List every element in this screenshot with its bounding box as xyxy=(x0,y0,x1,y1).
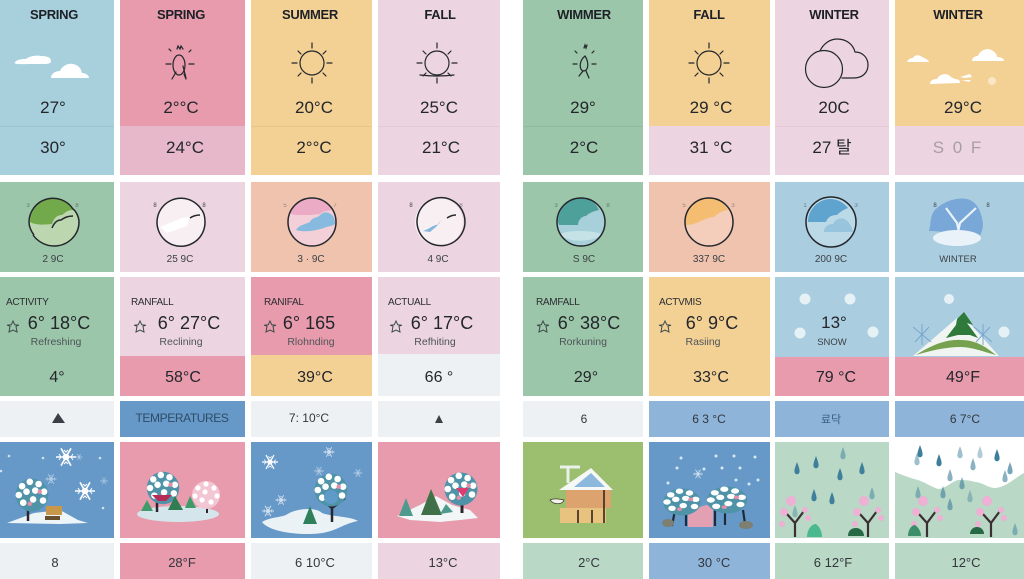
cell: value xyxy=(895,543,1024,579)
snow hills xyxy=(397,496,478,522)
icon: star xyxy=(7,321,19,332)
panel: white sky and green hill rain xyxy=(895,442,1024,538)
tick values: 3 xyxy=(554,203,558,209)
panel: row 4 strip values xyxy=(0,401,1024,437)
raindrops xyxy=(792,447,875,517)
icon: amber globe xyxy=(685,198,733,246)
panel: peach phase card, amber globe xyxy=(649,182,770,272)
panel: column 8 winter, yellow and pink xyxy=(895,0,1024,175)
cell: value: 6 xyxy=(581,412,588,426)
icon: sun over horizon xyxy=(417,43,457,83)
icon: clouds and wind xyxy=(907,49,1004,85)
tick values: 8 xyxy=(606,203,610,209)
heading: SPRING xyxy=(30,7,78,22)
cell: value: 7: 10°C xyxy=(289,411,329,425)
snow dots xyxy=(666,454,760,486)
tick values: 8 xyxy=(409,203,413,209)
temperature: 2°°C xyxy=(163,98,199,117)
value: 25 9C xyxy=(167,254,193,265)
panel: snow tree xyxy=(895,277,1024,396)
panel: green rain xyxy=(775,442,889,538)
tick values xyxy=(682,203,735,209)
blossom saplings xyxy=(779,496,884,537)
snowflakes xyxy=(0,448,108,509)
icon: blue blob with white figure xyxy=(929,199,983,246)
cell: value: 13°C xyxy=(428,555,458,570)
label: RANIFAL xyxy=(264,297,304,308)
panel: rainfall rose xyxy=(251,277,372,396)
temperature: 29° xyxy=(570,98,596,117)
cell: value xyxy=(251,543,372,579)
panel: green phase card, teal globe xyxy=(523,182,643,272)
cell: value xyxy=(120,543,245,579)
raindrops xyxy=(914,445,1018,535)
small green tree xyxy=(303,506,317,524)
tick values: 8 xyxy=(933,203,937,209)
temperature range: 6° 9°C xyxy=(686,313,738,333)
icon: clouds outline xyxy=(806,39,868,88)
cell: value: 2°C xyxy=(578,555,600,570)
cell: value xyxy=(895,401,1024,437)
tick values: 1 xyxy=(803,203,807,209)
blossom trees xyxy=(663,486,747,526)
panel: green phase card xyxy=(0,182,114,272)
tick values: 5 xyxy=(283,203,287,209)
icon: blue globe xyxy=(806,197,856,247)
icon: star xyxy=(264,321,276,332)
caption: Refreshing xyxy=(31,336,82,348)
temperature range: 6° 165 xyxy=(283,313,335,333)
caption: Rorkuning xyxy=(559,336,607,348)
heading: SPRING xyxy=(157,7,205,22)
tick values xyxy=(933,203,990,209)
temperature range: 6° 18°C xyxy=(28,313,90,333)
snow island xyxy=(137,506,219,522)
caption: Reclining xyxy=(159,336,203,348)
temperature: 20C xyxy=(818,98,850,117)
temperature: 31 °C xyxy=(690,138,732,157)
lower value: 39°C xyxy=(297,369,333,386)
temperature: 21°C xyxy=(422,138,460,157)
icon: sprout figure xyxy=(166,46,194,79)
snowflakes xyxy=(262,447,362,516)
tick values: 5 xyxy=(682,203,686,209)
temperature: 29 °C xyxy=(690,98,732,117)
icon: pink globe with blue cloud xyxy=(288,198,336,246)
heading: WINTER xyxy=(933,7,984,22)
snowflake xyxy=(693,470,703,478)
icon: clouds xyxy=(15,56,89,78)
icon: star xyxy=(537,321,549,332)
tick values: 8 xyxy=(202,203,206,209)
panel: row 2 moon phase icons xyxy=(0,182,1024,272)
lower value: 66 ° xyxy=(425,369,453,386)
tick values xyxy=(409,203,463,209)
cell: value xyxy=(523,401,643,437)
panel: light blue phase card, snowflake blob xyxy=(895,182,1024,272)
icon: star xyxy=(659,321,671,332)
blossom trees xyxy=(147,472,220,513)
lower value: 49°F xyxy=(946,369,980,386)
panel: pink with trees xyxy=(378,442,500,538)
temperature: 25°C xyxy=(420,98,458,117)
caption: Rasiing xyxy=(685,336,721,348)
caption: SNOW xyxy=(817,337,847,348)
temperature: 29°C xyxy=(944,98,982,117)
evergreen trees xyxy=(399,489,453,516)
tick values xyxy=(153,203,206,209)
tick values: 8 xyxy=(986,203,990,209)
value: 4 9C xyxy=(427,254,449,265)
heading: WIMMER xyxy=(557,7,612,22)
shrubs xyxy=(807,524,864,537)
cell: tent icon xyxy=(0,401,114,437)
panel: column 4 fall, light pink xyxy=(378,0,500,175)
label: ACTUALL xyxy=(388,297,432,308)
panel: column 7 winter, light pink xyxy=(775,0,889,175)
temperature: S 0 F xyxy=(933,138,983,157)
icon: evergreen tree xyxy=(913,312,999,356)
ground snow xyxy=(7,510,88,524)
cell: value: 6 7°C xyxy=(950,412,980,426)
cell: value: 30 °C xyxy=(698,555,730,570)
panel: column 5 winter, green xyxy=(523,0,643,175)
label: RANFALL xyxy=(131,297,174,308)
icon: star xyxy=(134,321,146,332)
label: ACTVMIS xyxy=(659,297,702,308)
tick values xyxy=(554,203,610,209)
heading: FALL xyxy=(424,7,456,22)
tick values: 8 xyxy=(153,203,157,209)
panel: column 2 spring, pink xyxy=(120,0,245,175)
tick values: 8 xyxy=(75,203,79,209)
panel: snowy hill and wreath tree xyxy=(251,442,372,538)
caption: WINTER xyxy=(939,254,977,265)
lower value: 33°C xyxy=(693,369,729,386)
label: ACTIVITY xyxy=(6,297,49,308)
snow hills xyxy=(262,509,358,534)
blossom tree xyxy=(16,478,48,521)
lower value: 58°C xyxy=(165,369,201,386)
panel: row 1 season headers and temperatures xyxy=(0,0,1024,175)
tick values: 3 xyxy=(854,203,858,209)
panel: snow xyxy=(775,277,889,396)
temperature: 2°C xyxy=(570,138,598,157)
icon: star xyxy=(390,321,402,332)
shrubs xyxy=(908,525,984,536)
panel: row 3 activity cards xyxy=(0,277,1024,396)
bench xyxy=(45,506,62,520)
temperature range: 6° 38°C xyxy=(558,313,620,333)
label: RAMFALL xyxy=(536,297,580,308)
cell: value: 료닥 xyxy=(821,413,841,426)
cell: value: 6 3 °C xyxy=(692,412,726,426)
cell: small icon xyxy=(378,401,500,437)
value: 337 9C xyxy=(693,254,725,265)
panel: light pink phase card xyxy=(378,182,500,272)
cell: value xyxy=(378,543,500,579)
temperature: 13° xyxy=(821,313,847,332)
heading: FALL xyxy=(693,7,725,22)
panel: activity yellow xyxy=(649,277,770,396)
panel: light pink phase card xyxy=(120,182,245,272)
panel: blossom trees on island xyxy=(120,442,245,538)
heading: SUMMER xyxy=(282,7,339,22)
value: 3 · 9C xyxy=(297,254,325,265)
heading: WINTER xyxy=(809,7,860,22)
cell: value: 8 xyxy=(51,555,59,570)
temperature: 24°C xyxy=(166,138,204,157)
lower value: 4° xyxy=(49,369,65,386)
panel: column 6 fall, yellow and pink xyxy=(649,0,770,175)
cell: value xyxy=(649,401,770,437)
cell: value xyxy=(0,543,114,579)
temperature: 2°°C xyxy=(296,138,332,157)
small green trees xyxy=(141,496,196,511)
panel: column 1 spring, blue xyxy=(0,0,114,175)
temperature range: 6° 17°C xyxy=(411,313,473,333)
icon: faint snowflakes xyxy=(913,324,992,345)
cell: value: 6 12°F xyxy=(814,555,852,570)
panel: actual pink xyxy=(378,277,500,396)
panel: rainfall green xyxy=(523,277,643,396)
icon: sprout figure xyxy=(573,45,596,78)
panel: green with house xyxy=(523,442,643,538)
value: 200 9C xyxy=(815,254,847,265)
cell: temperatures xyxy=(120,401,245,437)
icon: white globe xyxy=(157,198,205,246)
blossom tree xyxy=(444,472,478,513)
cell: value: 6 10°C xyxy=(295,555,335,570)
lower value: 79 °C xyxy=(816,369,856,386)
temperature range: 6° 27°C xyxy=(158,313,220,333)
panel: peach phase card xyxy=(251,182,372,272)
caption: Refhiting xyxy=(414,336,456,348)
temperature: 27 탈 xyxy=(812,138,852,157)
icon: snowballs xyxy=(944,294,1010,338)
panel: column 3 summer, yellow xyxy=(251,0,372,175)
panel: snowy tree and bench xyxy=(0,442,114,538)
cell: value: 12°C xyxy=(951,555,981,570)
temperature: 30° xyxy=(40,138,66,157)
icon: green globe xyxy=(29,198,79,246)
blossom saplings xyxy=(911,496,1007,537)
pink house xyxy=(688,505,713,527)
temperature: 27° xyxy=(40,98,66,117)
cell: value xyxy=(649,543,770,579)
tick values xyxy=(26,203,79,209)
temperature: 20°C xyxy=(295,98,333,117)
panel: rainfall pink xyxy=(120,277,245,396)
cell: value xyxy=(775,401,889,437)
icon: teal globe xyxy=(557,198,605,246)
value: S 9C xyxy=(573,254,595,265)
panel: row 5 illustrations xyxy=(0,442,1024,538)
icon: snowballs xyxy=(794,294,878,338)
panel: light blue phase card, blue globe xyxy=(775,182,889,272)
panel: activity green xyxy=(0,277,114,396)
tick values: 3 xyxy=(26,203,30,209)
rocks xyxy=(662,519,753,529)
panel: row 6 footer values xyxy=(0,543,1024,579)
tick values xyxy=(803,203,858,209)
snowy sky xyxy=(895,442,1024,489)
lower value: 29° xyxy=(574,369,598,386)
caption: Rlohnding xyxy=(287,336,335,348)
cell: value xyxy=(251,401,372,437)
icon: sun xyxy=(292,43,332,83)
wreath tree xyxy=(314,474,348,522)
tick values: 7 xyxy=(333,203,337,209)
tick values xyxy=(283,203,337,209)
cell: value: 28°F xyxy=(168,555,196,570)
icon: white globe with streak xyxy=(415,198,465,246)
cell: value xyxy=(775,543,889,579)
panel: blue night blossom xyxy=(649,442,770,538)
tick values: 3 xyxy=(731,203,735,209)
icon: house xyxy=(550,467,613,523)
tick values: 8 xyxy=(459,203,463,209)
icon: sun xyxy=(689,43,729,83)
cell: value xyxy=(523,543,643,579)
cell: temperatures: TEMPERATURES xyxy=(136,411,229,425)
value: 2 9C xyxy=(42,254,64,265)
